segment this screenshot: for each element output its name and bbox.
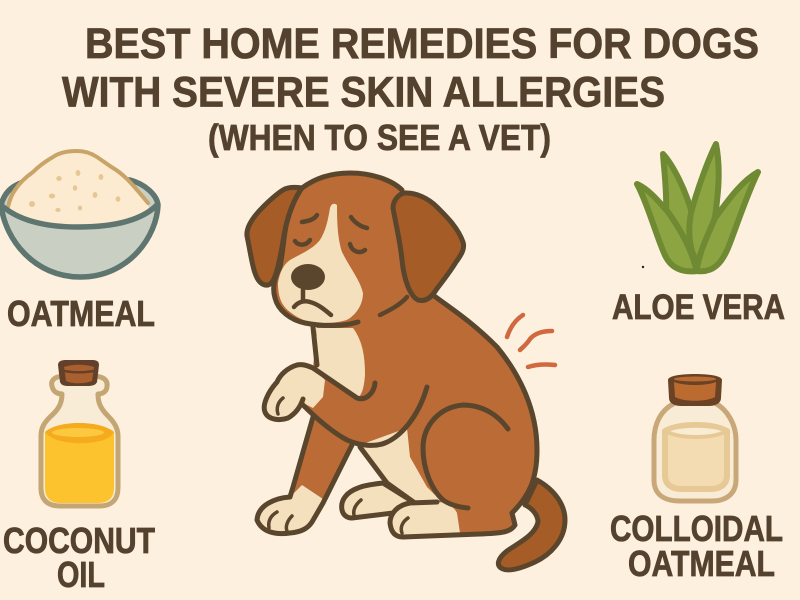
body bbox=[303, 290, 537, 537]
label: coconut oil bbox=[3, 520, 155, 595]
right ear bbox=[393, 193, 464, 301]
tail bbox=[498, 480, 565, 570]
label: oatmeal: OATMEAL bbox=[7, 293, 155, 334]
left ear bbox=[247, 187, 302, 285]
back outline bbox=[433, 295, 537, 513]
label: colloidal oatmeal: OATMEAL bbox=[628, 543, 775, 584]
title bbox=[62, 20, 759, 158]
head outline bbox=[274, 173, 402, 326]
front leg bbox=[290, 417, 352, 503]
mouth bbox=[294, 290, 331, 315]
front paw outline bbox=[257, 417, 352, 534]
front paw cream bbox=[258, 485, 323, 533]
label: colloidal oatmeal bbox=[610, 508, 783, 584]
title: WITH SEVERE SKIN ALLERGIES bbox=[62, 68, 665, 116]
brows and eyes bbox=[295, 215, 367, 252]
speck bbox=[642, 266, 644, 268]
raised paw bbox=[264, 365, 325, 420]
chest bbox=[315, 328, 365, 398]
illustration: sad itchy dog bbox=[247, 173, 565, 570]
label: coconut oil: COCONUT bbox=[3, 520, 155, 561]
icon: oatmeal bowl bbox=[1, 151, 158, 277]
label: coconut oil: OIL bbox=[57, 554, 105, 595]
haunch bbox=[423, 405, 508, 508]
scratch marks bbox=[507, 315, 555, 367]
title: (WHEN TO SEE A VET) bbox=[208, 117, 551, 158]
rear paw bbox=[342, 483, 415, 518]
nose bbox=[291, 264, 325, 290]
icon: colloidal oatmeal jar bbox=[654, 374, 736, 501]
belly and second leg bbox=[360, 428, 440, 503]
muzzle blaze bbox=[278, 204, 363, 323]
rear foot bbox=[390, 502, 460, 537]
icon: coconut oil bottle bbox=[41, 360, 118, 506]
head bbox=[274, 173, 420, 325]
title: BEST HOME REMEDIES FOR DOGS bbox=[85, 20, 759, 68]
arm line bbox=[303, 387, 427, 445]
icon: aloe vera bbox=[637, 144, 758, 271]
